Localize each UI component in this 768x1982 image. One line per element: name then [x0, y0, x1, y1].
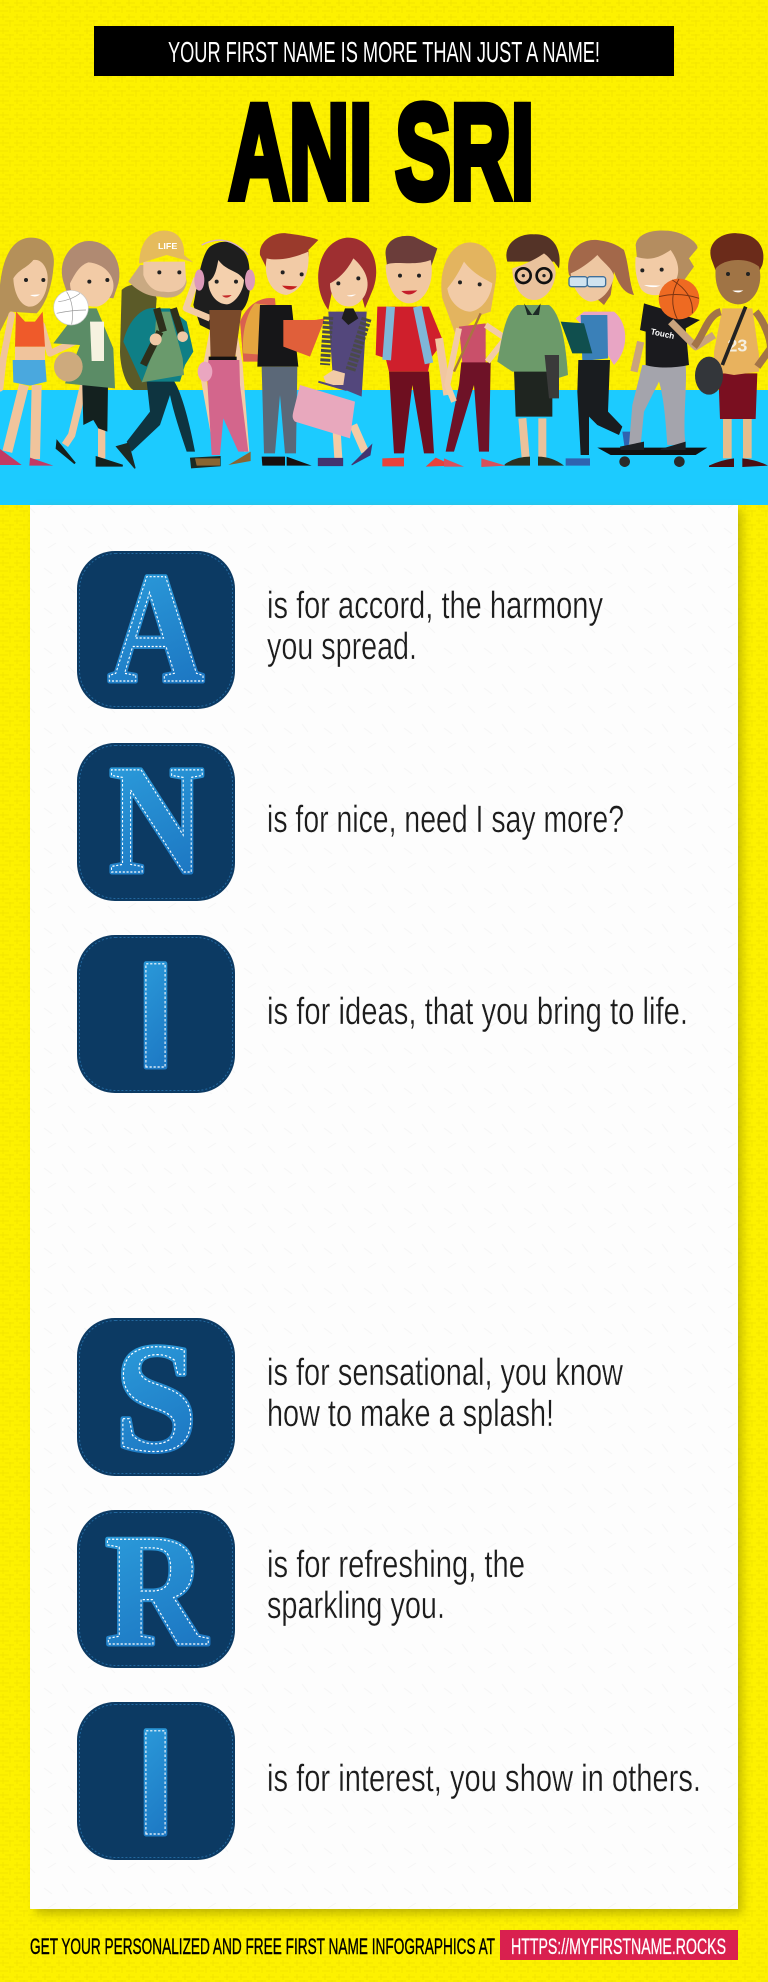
- figure: boy in tank top with shoulder bag: [694, 233, 768, 467]
- icon: letter S: S: [115, 1311, 197, 1484]
- banner floor: [0, 390, 768, 505]
- panel: white card: [30, 505, 738, 1909]
- row: letter S: [77, 1311, 623, 1484]
- figure: boy in tank top with shoulder bag: 23: [727, 336, 748, 356]
- icon: letter I: I: [137, 931, 174, 1099]
- figure: boy with glasses and green sweater: [497, 234, 568, 466]
- icon: letter A: A: [108, 541, 204, 716]
- row: second letter I: [77, 1698, 701, 1866]
- figure: red-haired girl with pink bag: [293, 238, 376, 466]
- icon: letter A: A: [108, 541, 204, 716]
- figure: boy on skateboard with basketball: [597, 230, 714, 467]
- illustration: group of young people: [0, 230, 768, 468]
- figure: boy with red book: [240, 233, 325, 466]
- text: S line: is for sensational, you know: [267, 1352, 623, 1394]
- text: S line: how to make a splash!: [267, 1393, 554, 1435]
- title: name: ANI SRI: [229, 78, 534, 227]
- icon: letter R: R: [105, 1501, 208, 1679]
- text: R line: is for refreshing, the: [267, 1544, 525, 1586]
- header bar with tagline: [94, 26, 674, 76]
- figure: blonde girl in pink top: [441, 242, 506, 467]
- figure: girl with long hair: [0, 238, 78, 466]
- icon: letter N: N: [109, 733, 204, 906]
- figure: girl with volleyball: [53, 241, 123, 466]
- icon: second letter I: I: [137, 1698, 174, 1866]
- icon: letter I: [77, 931, 235, 1099]
- text: A line: you spread.: [267, 626, 417, 668]
- icon: letter S: S: [115, 1311, 197, 1484]
- figure: boy in red t-shirt with blue straps: [376, 236, 453, 467]
- card shadow: [36, 510, 742, 1914]
- row: letter A: [77, 541, 603, 716]
- figure: girl with ponytail and tablet: [561, 240, 634, 466]
- icon: letter N: N: [109, 733, 204, 906]
- footer: [30, 1930, 738, 1960]
- row: letter R: [77, 1501, 525, 1679]
- figure: hiker with backpack and cap: LIFE: [158, 241, 178, 251]
- icon: second letter I: I: [137, 1698, 174, 1866]
- text: R line: sparkling you.: [267, 1585, 445, 1627]
- footer call to action: GET YOUR PERSONALIZED AND FREE FIRST NAME INFOGRAPHICS AT: [30, 1934, 495, 1959]
- left six figures: [0, 231, 376, 468]
- figure: hiker with backpack and cap: [117, 231, 220, 468]
- text: N line: is for nice, need I say more?: [267, 799, 624, 841]
- icon: second letter I: [77, 1698, 235, 1866]
- icon: letter I: I: [137, 931, 174, 1099]
- figure: boy on skateboard with basketball: Touch: [650, 326, 675, 341]
- row: letter N: [77, 733, 624, 906]
- text: A line: is for accord, the harmony: [267, 585, 603, 627]
- right six figures: [376, 230, 768, 467]
- icon: letter R: R: [105, 1501, 208, 1679]
- row: letter I: [77, 931, 688, 1099]
- figure: girl with headphones: [186, 240, 255, 466]
- icon: letter S: [77, 1311, 235, 1484]
